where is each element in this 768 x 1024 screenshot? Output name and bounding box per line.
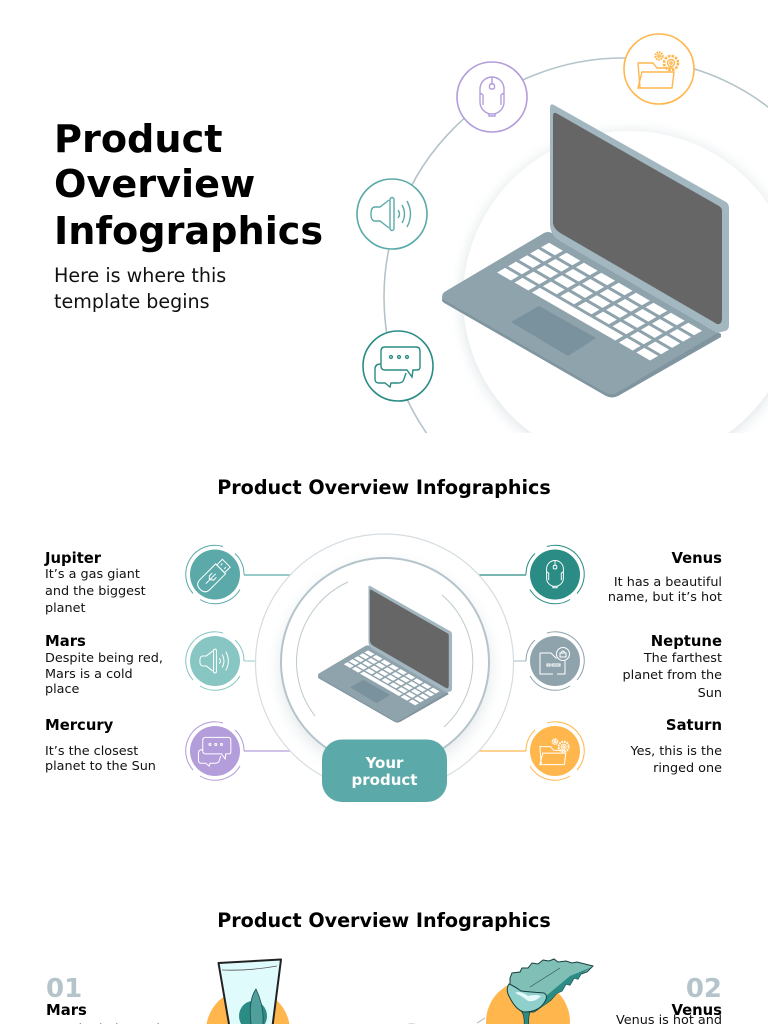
icon: speaker: [357, 179, 427, 249]
icon: chat: [186, 722, 244, 780]
your product badge: Your: [365, 754, 404, 772]
text: Jupiter: [44, 550, 146, 616]
title: Product: [54, 118, 222, 162]
subtitle: Here is where this: [54, 264, 226, 287]
text: Mercury: Mercury: [45, 717, 114, 734]
text: Saturn: Saturn: [666, 717, 722, 734]
text: step 01: Mars: [46, 1002, 87, 1019]
heading: third slide: Product Overview Infographics: [217, 909, 551, 932]
text: Venus: It has a beautiful: [614, 575, 722, 590]
laptop: [318, 586, 452, 723]
heading: second slide: Product Overview Infographics: [217, 476, 551, 499]
icon: mouse: [526, 545, 584, 604]
text: Mars: Mars: [45, 633, 86, 650]
text: step 02: Venus: [671, 1002, 722, 1019]
text: Neptune: Sun: [698, 686, 722, 701]
text: step 01: 01: [46, 974, 82, 1004]
text: Venus: name, but it’s hot: [608, 590, 722, 605]
icon: speaker: [186, 632, 244, 690]
text: Saturn: ringed one: [653, 761, 722, 776]
icon: folder with gears: [624, 34, 694, 104]
text: Mars: [45, 633, 163, 697]
middle ring with shadow: [279, 558, 491, 774]
text: Jupiter: and the biggest: [45, 584, 146, 599]
decorative fragments: [404, 1018, 485, 1024]
text: Venus: Venus: [671, 550, 722, 567]
icon: usb: [186, 545, 244, 604]
illustration: aloe leaf: [486, 959, 593, 1024]
title: [54, 118, 323, 254]
icon: mouse: [457, 62, 527, 132]
white disc with shadow: [462, 131, 768, 468]
text: Jupiter: It’s a gas giant: [45, 567, 140, 582]
text: step 01: [46, 974, 160, 1024]
illustration: cream tube: [206, 960, 290, 1024]
text: Mercury: [45, 717, 156, 774]
text: step 02: [616, 974, 722, 1024]
icon: folder gears: [526, 722, 584, 780]
text: Neptune: Neptune: [651, 633, 722, 650]
text: Jupiter: Jupiter: [44, 550, 102, 567]
outer ring: [256, 534, 514, 792]
text: Mars: place: [45, 682, 80, 697]
panel: product diagram: [244, 534, 526, 802]
subtitle: [54, 264, 226, 313]
subtitle: template begins: [54, 290, 210, 313]
text: Saturn: Yes, this is the: [629, 744, 722, 759]
text: Mercury: It’s the closest: [45, 744, 138, 759]
text: Venus: [608, 550, 722, 605]
text: Mars: Mars is a cold: [45, 667, 133, 682]
text: Saturn: [629, 717, 722, 776]
panel: hero illustration: [356, 33, 768, 433]
laptop: [442, 104, 729, 397]
text: step 02: 02: [686, 974, 722, 1004]
inner arcs: [297, 582, 473, 727]
orbit ring: [383, 57, 768, 433]
text: Jupiter: planet: [45, 601, 86, 616]
your product badge: [322, 740, 447, 802]
title: Infographics: [54, 210, 323, 254]
icon: chat bubbles: [363, 331, 433, 401]
your product badge: product: [352, 771, 417, 789]
icon: folder lock: [526, 632, 584, 690]
text: Neptune: planet from the: [623, 668, 722, 683]
connector lines: [244, 575, 526, 751]
text: Neptune: The farthest: [643, 651, 722, 666]
text: Mercury: planet to the Sun: [45, 759, 156, 774]
text: Neptune: [623, 633, 722, 701]
title: Overview: [54, 163, 255, 207]
text: Mars: Despite being red,: [45, 651, 163, 666]
